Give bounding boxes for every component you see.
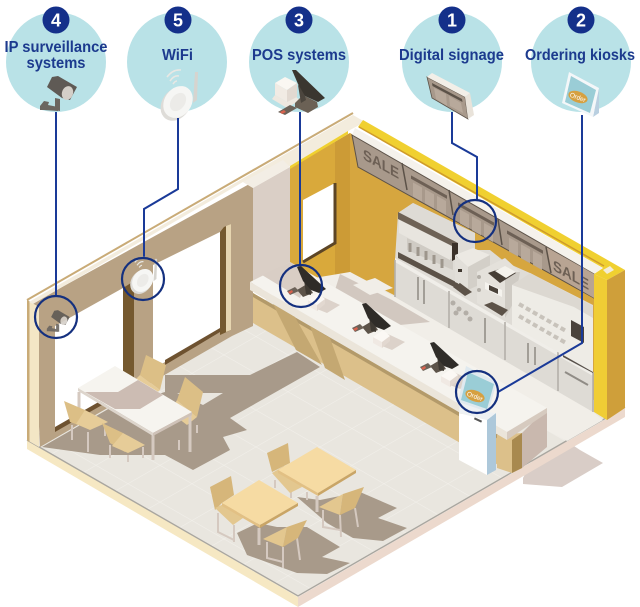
sun patch	[177, 393, 223, 405]
highlight ring: kiosk	[456, 371, 498, 413]
leader line 1	[452, 112, 477, 200]
chair	[64, 401, 108, 452]
badge 5: 5	[173, 10, 183, 30]
badge 2: 2	[576, 10, 586, 30]
floor slab	[27, 250, 625, 607]
chair	[130, 355, 166, 398]
leader line 4	[55, 112, 57, 296]
ordering kiosk	[458, 366, 497, 475]
badge 4: 4	[51, 10, 61, 30]
icon: security camera	[40, 76, 77, 111]
label: POS systems	[252, 47, 346, 64]
callout 1: Digital signage	[399, 6, 504, 119]
highlight ring: signage	[454, 200, 496, 242]
chair	[267, 443, 302, 493]
ordering kiosk: Order	[466, 391, 484, 403]
window 1	[55, 288, 123, 430]
outside shadow	[523, 433, 603, 487]
left wall	[27, 113, 365, 447]
floor shadows	[42, 352, 407, 574]
menu panel	[507, 230, 543, 271]
menu board signage	[352, 120, 625, 298]
leader line 3	[299, 112, 301, 265]
menu panel	[411, 175, 447, 216]
highlight ring: POS	[280, 265, 322, 307]
highlight ring: wifi	[122, 258, 164, 300]
callout 2: Ordering kiosks	[525, 6, 635, 117]
equipment backdrop	[395, 203, 593, 372]
window in gold wall	[303, 183, 335, 262]
chair	[170, 377, 203, 450]
pier outer face	[27, 300, 39, 447]
cabinets	[395, 258, 593, 412]
label line 2: systems	[26, 55, 86, 72]
POS terminal 2	[352, 303, 405, 350]
menu panel	[458, 202, 494, 243]
leader line 2	[498, 115, 582, 392]
chair	[210, 476, 243, 525]
table 2 with chairs	[210, 476, 307, 568]
front chairs, table 1	[64, 401, 145, 462]
window 2	[153, 232, 220, 369]
icon: POS terminal	[272, 70, 325, 115]
gold wall left	[290, 131, 350, 295]
top strip	[29, 115, 365, 304]
sale sign left: SALE	[363, 146, 399, 183]
right pillar	[594, 266, 625, 420]
icon: wifi router	[154, 70, 199, 127]
shelf rack	[512, 273, 593, 372]
POS terminal 3	[420, 342, 473, 389]
behind-counter floor	[290, 272, 603, 441]
sale sign right: SALE	[553, 257, 589, 294]
chair	[319, 487, 364, 515]
POS terminal 1	[287, 266, 340, 313]
front counter	[250, 262, 547, 473]
label: IP surveillance	[4, 39, 108, 56]
callout 4: IP surveillance systems	[4, 6, 108, 112]
label: Digital signage	[399, 47, 504, 64]
callout 3: POS systems	[249, 6, 349, 115]
icon: digital sign	[427, 73, 474, 119]
badge 3: 3	[294, 10, 304, 30]
highlight ring: camera	[35, 296, 77, 338]
chair	[102, 423, 145, 462]
icon: wifi on wall	[126, 257, 158, 298]
badge 1: 1	[447, 10, 457, 30]
gold wall right	[350, 133, 594, 400]
table 1	[78, 366, 192, 460]
icon: camera on wall	[47, 310, 70, 332]
drink machine	[398, 203, 475, 289]
icon: kiosk screen: Order	[569, 92, 587, 104]
left back pillar	[243, 160, 290, 290]
back chairs, table 1	[130, 355, 203, 450]
coffee machines	[450, 248, 520, 322]
leader line 5	[144, 118, 178, 258]
table 3 with chairs	[267, 443, 364, 537]
chair	[263, 520, 307, 547]
label: WiFi	[162, 47, 193, 64]
callout 5: WiFi	[127, 6, 227, 127]
